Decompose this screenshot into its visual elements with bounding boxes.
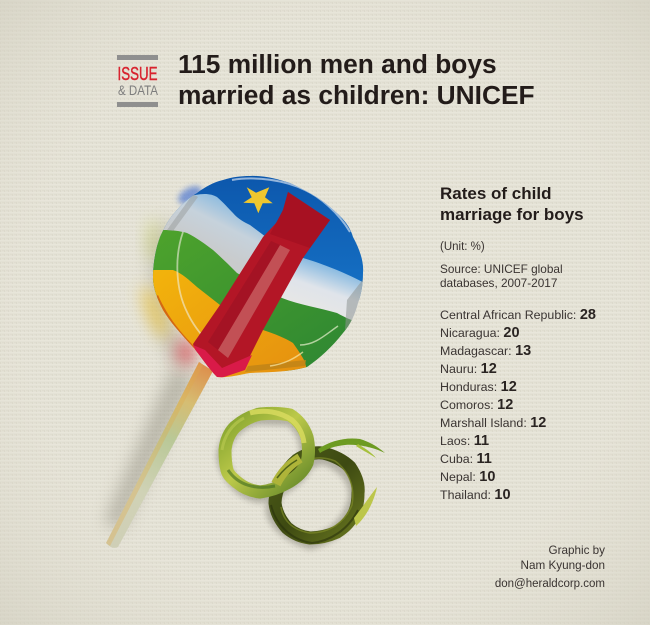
country data list: Nauru: 12	[440, 361, 497, 377]
flag star	[243, 187, 273, 213]
title: married as children: UNICEF	[178, 80, 535, 110]
candy disc	[153, 176, 364, 378]
title: 115 million men and boys	[178, 49, 497, 79]
lollipop stick	[106, 362, 213, 548]
logo: Issue & Data	[117, 55, 159, 107]
country data list: Thailand: 10	[440, 487, 511, 503]
ring shadows	[222, 419, 355, 543]
grey glass rim	[345, 278, 364, 330]
logo: Issue & Data: & DATA	[118, 82, 159, 98]
flag band: blue	[150, 170, 370, 300]
flag band: yellow	[153, 270, 306, 378]
unit note: (Unit: %)	[440, 241, 485, 253]
credit	[495, 544, 605, 590]
credit: Graphic by	[548, 544, 605, 557]
red prohibition stripe	[193, 192, 330, 373]
icon: woven grass rings	[222, 411, 385, 543]
country data list: Honduras: 12	[440, 379, 517, 395]
dark ring overlap strands	[276, 458, 300, 484]
flag band: green	[153, 230, 352, 372]
icon: lollipop with Central African Republic flag	[104, 170, 370, 548]
grass blades	[318, 438, 385, 453]
credit: don@heraldcorp.com	[495, 578, 605, 590]
country data list: Laos: 11	[440, 433, 489, 449]
flag band: white right	[281, 258, 362, 319]
dark ring	[271, 438, 385, 543]
glass highlights	[176, 232, 201, 334]
country data list: Nicaragua: 20	[440, 325, 520, 341]
light ring	[222, 411, 308, 492]
country data list: Madagascar: 13	[440, 343, 531, 359]
country data list	[440, 307, 596, 503]
credit: Nam Kyung-don	[521, 559, 605, 572]
lollipop shadow	[104, 182, 205, 530]
country data list: Central African Republic: 28	[440, 307, 596, 323]
source note: Source: UNICEF global	[440, 262, 563, 276]
country data list: Marshall Island: 12	[440, 415, 546, 431]
orange rim	[156, 295, 194, 348]
country data list: Nepal: 10	[440, 469, 495, 485]
crimson candy tip	[193, 345, 252, 379]
heading: rates of child marriage: marriage for boys	[440, 205, 584, 224]
country data list: Comoros: 12	[440, 397, 513, 413]
source note: databases, 2007-2017	[440, 276, 557, 290]
logo: Issue & Data: ISSUE	[118, 64, 158, 84]
heading: rates of child marriage: Rates of child	[440, 184, 551, 203]
country data list: Cuba: 11	[440, 451, 492, 467]
flag band: white left	[158, 194, 264, 274]
